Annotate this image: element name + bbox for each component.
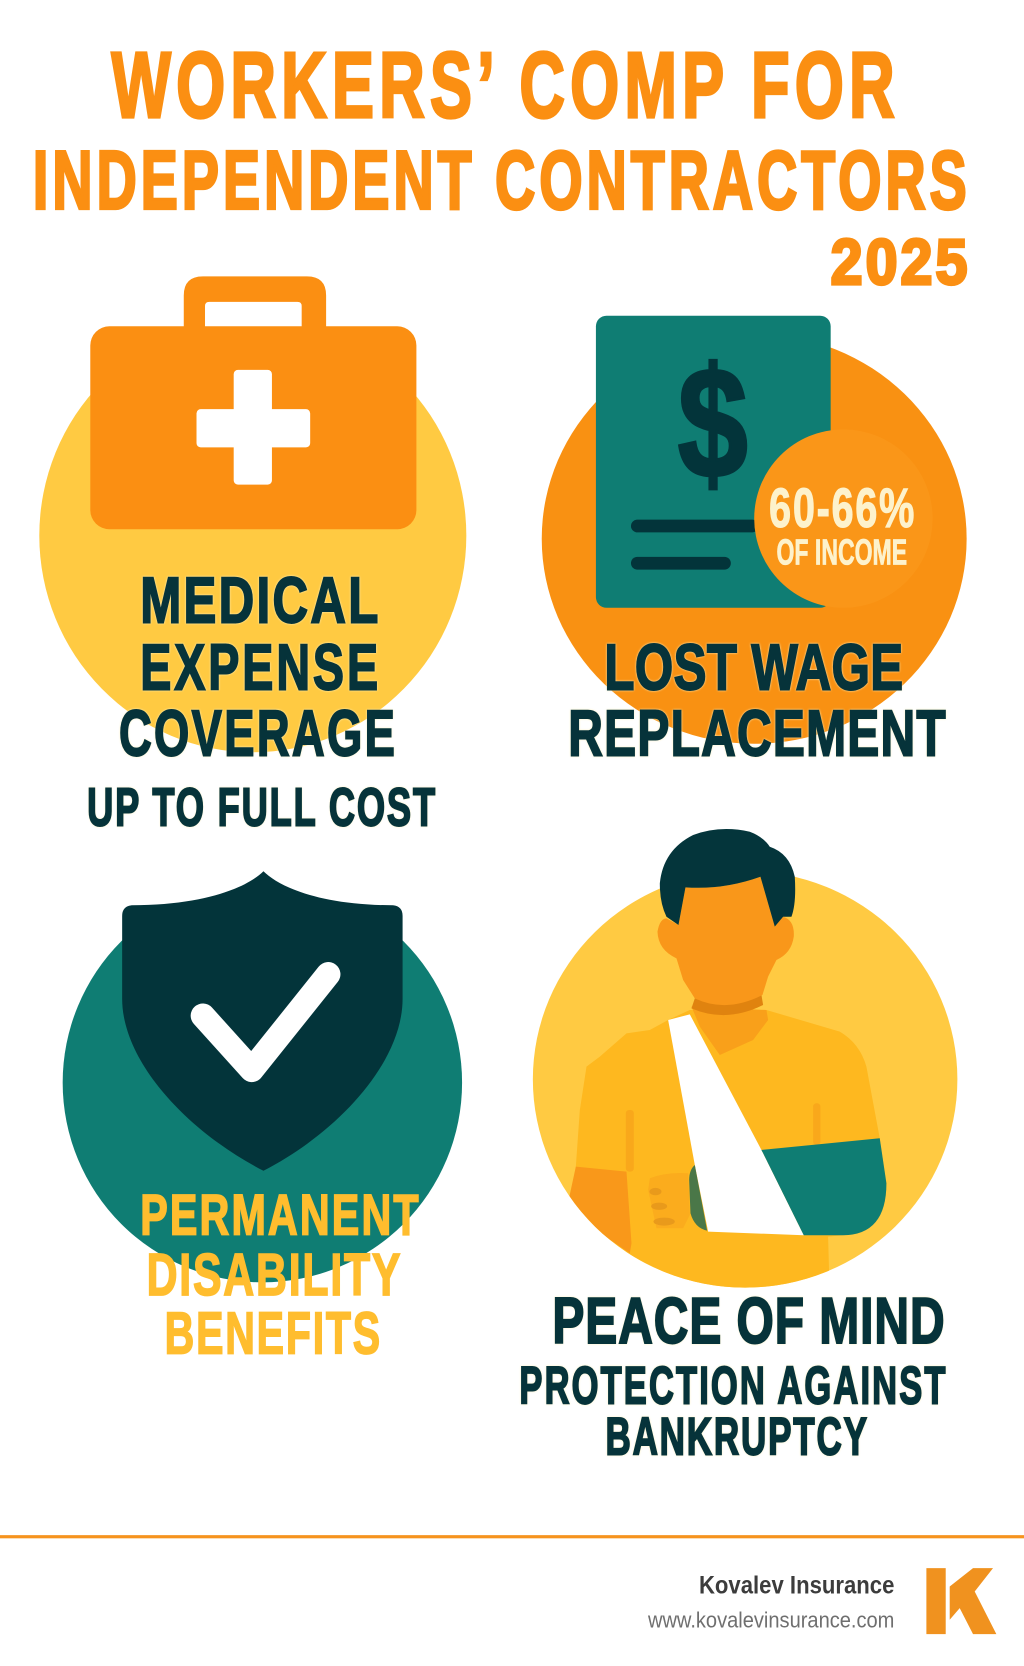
callout: 60-66% of income: 60-66% xyxy=(769,478,914,540)
yellow circle background xyxy=(39,395,466,752)
callout: 60-66% of income: OF INCOME xyxy=(776,531,907,572)
title: WORKERS’ COMP FOR xyxy=(112,33,895,137)
icon: pay document xyxy=(596,316,831,608)
heading: lost wage replacement: LOST WAGE xyxy=(604,632,903,704)
panel: lost wage replacement xyxy=(542,316,967,770)
callout: 60-66% of income xyxy=(754,429,933,608)
panel: medical expense coverage xyxy=(39,276,466,837)
heading: medical expense coverage xyxy=(119,565,395,769)
subheading: protection against bankruptcy: PROTECTION AGAINST xyxy=(519,1356,945,1415)
orange circle background xyxy=(542,334,967,744)
panel: peace of mind xyxy=(519,829,957,1466)
subheading: up to full cost: UP TO FULL COST xyxy=(87,776,435,837)
title: 2025 xyxy=(831,226,967,297)
icon: shield with check xyxy=(122,871,403,1171)
heading: permanent disability benefits: PERMANENT xyxy=(140,1183,419,1247)
icon: first aid kit xyxy=(90,276,416,529)
heading: medical expense coverage: COVERAGE xyxy=(119,696,395,769)
heading: medical expense coverage: EXPENSE xyxy=(140,631,378,703)
logo: K mark xyxy=(926,1568,996,1634)
heading: medical expense coverage: MEDICAL xyxy=(140,565,378,637)
heading: permanent disability benefits: BENEFITS xyxy=(165,1300,380,1366)
subheading: protection against bankruptcy xyxy=(519,1356,945,1466)
footer: company name and url xyxy=(647,1572,895,1633)
illustration: worker with arm in sling xyxy=(533,829,957,1297)
teal circle background xyxy=(62,940,462,1282)
heading: permanent disability benefits xyxy=(140,1183,419,1366)
heading: lost wage replacement: REPLACEMENT xyxy=(568,697,946,770)
heading: lost wage replacement xyxy=(568,632,946,770)
subheading: protection against bankruptcy: BANKRUPTCY xyxy=(605,1406,867,1466)
panel: permanent disability benefits xyxy=(63,871,462,1366)
heading: peace of mind: PEACE OF MIND xyxy=(552,1285,945,1358)
icon: pay document: $ xyxy=(678,336,748,511)
footer: company name and url: www.kovalevinsurance.com xyxy=(647,1608,894,1633)
title xyxy=(33,33,967,297)
footer: company name and url: Kovalev Insurance xyxy=(699,1572,895,1600)
title: INDEPENDENT CONTRACTORS xyxy=(33,133,967,226)
heading: permanent disability benefits: DISABILITY xyxy=(147,1241,401,1308)
